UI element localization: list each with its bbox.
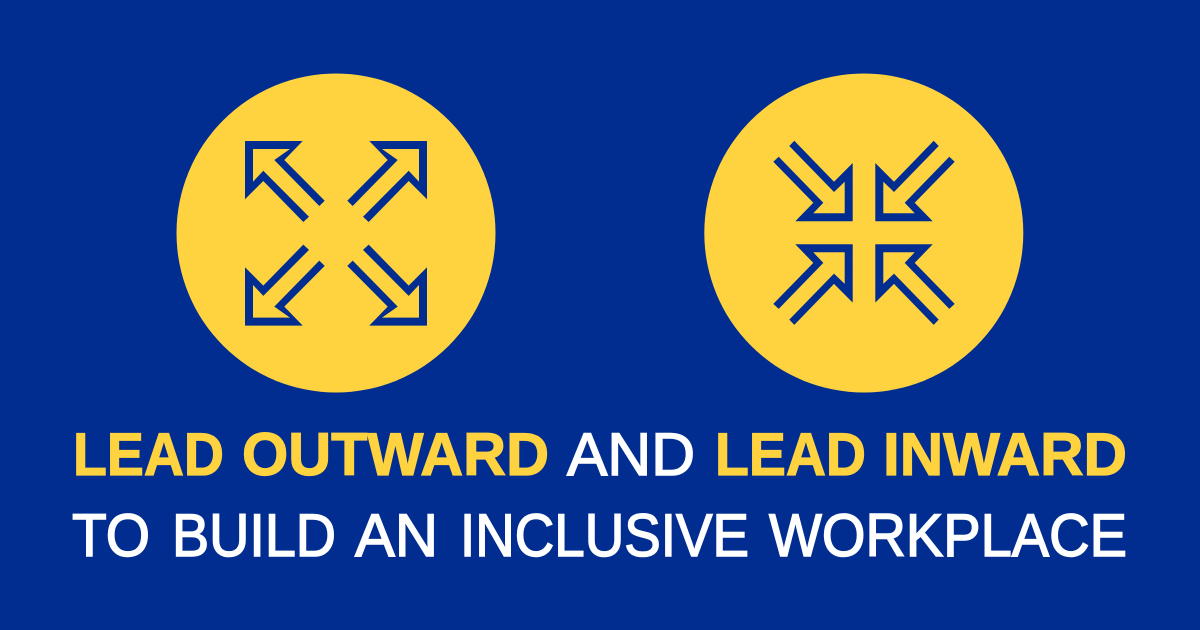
arrow: up-right [347, 141, 427, 222]
yellow circle right [704, 74, 1023, 392]
title line 2: AN [355, 502, 438, 569]
arrow: down-left [245, 245, 325, 326]
arrow: toward center from bottom-left [773, 244, 853, 325]
title line 1 [73, 421, 1127, 488]
icon: arrows pointing inward [704, 74, 1023, 392]
arrow: toward center from top-left [773, 141, 853, 221]
arrow: toward center from bottom-right [875, 244, 955, 325]
title line 2 [72, 502, 1127, 569]
yellow circle left [176, 74, 496, 392]
title line 2: TO [72, 502, 150, 569]
arrow: up-left [245, 141, 325, 222]
icon: arrows pointing outward [176, 74, 496, 392]
title line 1: LEAD [73, 421, 224, 488]
arrow: toward center from top-right [875, 141, 955, 221]
arrow: down-right [347, 245, 427, 326]
title line 2: BUILD [172, 502, 336, 569]
title line 1: INWARD [883, 421, 1127, 488]
title [72, 421, 1127, 569]
title line 1: AND [567, 421, 695, 488]
title line 1: OUTWARD [242, 421, 549, 488]
title line 1: LEAD [715, 421, 866, 488]
title line 2: WORKPLACE [769, 502, 1127, 569]
title line 2: INCLUSIVE [460, 502, 749, 569]
